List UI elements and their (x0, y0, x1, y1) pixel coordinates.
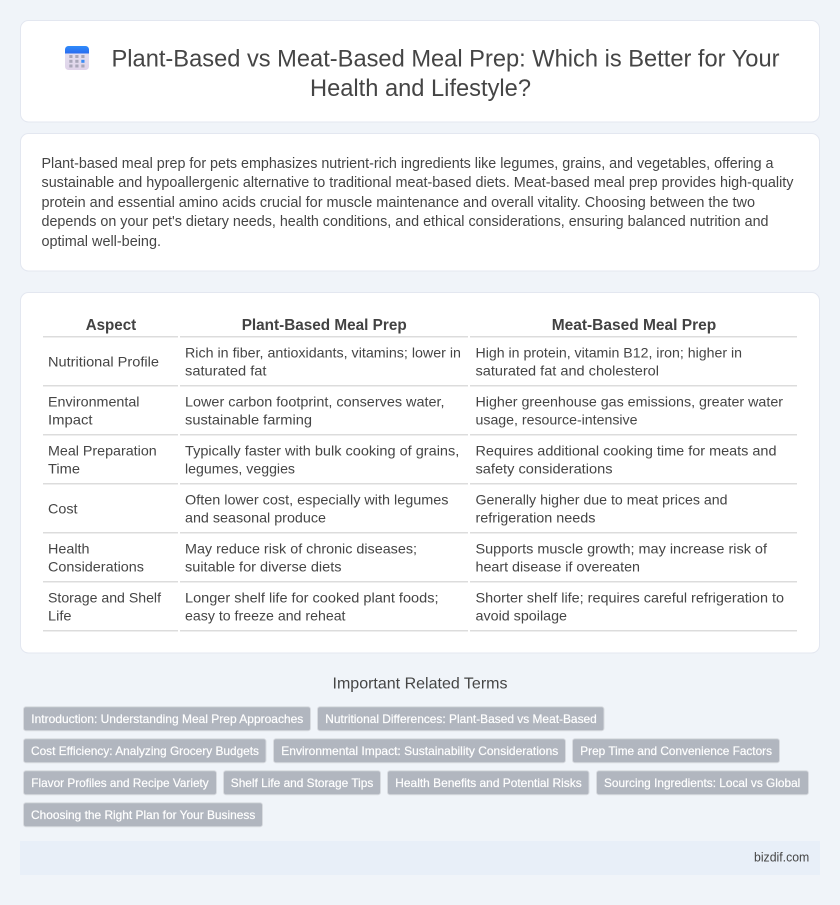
table row: meal preparation time (43, 442, 797, 484)
table row: health considerations: Considerations (48, 558, 144, 574)
table row: nutritional profile (43, 344, 797, 386)
table row: health considerations: suitable for diverse diets (185, 558, 342, 574)
tag: Nutritional Differences: Plant-Based vs Meat-Based (325, 712, 597, 726)
table row: cost: refrigeration needs (476, 510, 596, 526)
table row: nutritional profile: Rich in fiber, antioxidants, vitamins; lower in (185, 344, 461, 360)
table row: cost (43, 492, 797, 534)
text block: introduction paragraph (42, 156, 794, 250)
table row: nutritional profile: Nutritional Profile (48, 354, 159, 370)
table row: storage and shelf life: easy to freeze and reheat (185, 608, 346, 624)
table row: health considerations: Health (48, 540, 90, 556)
tag: Sourcing Ingredients: Local vs Global (604, 776, 800, 790)
table row: environmental impact: usage, resource-intensive (476, 412, 638, 428)
tag (224, 771, 380, 795)
table row: meal preparation time: Requires additional cooking time for meats and (476, 442, 776, 458)
tag: Environmental Impact: Sustainability Considerations (281, 744, 558, 758)
tag (388, 771, 589, 795)
panel: related term tags (24, 707, 808, 827)
tag: Shelf Life and Storage Tips (231, 776, 373, 790)
tag: Cost Efficiency: Analyzing Grocery Budgets (31, 744, 259, 758)
table row: environmental impact: sustainable farming (185, 412, 312, 428)
table row: cost: Generally higher due to meat prices and (476, 492, 728, 508)
table row: meal preparation time: legumes, veggies (185, 460, 295, 476)
table row: cost: and seasonal produce (185, 510, 326, 526)
footer (20, 841, 820, 875)
table row: environmental impact: Impact (48, 412, 93, 428)
table row: meal preparation time: Meal Preparation (48, 442, 157, 458)
table row: storage and shelf life: Longer shelf life for cooked plant foods; (185, 590, 438, 606)
table row: cost: Often lower cost, especially with legumes (185, 492, 448, 508)
table row: storage and shelf life: Storage and Shelf (48, 590, 161, 606)
table row: storage and shelf life: avoid spoilage (476, 608, 567, 624)
table row: health considerations: May reduce risk of chronic diseases; (185, 540, 417, 556)
table row: storage and shelf life: Shorter shelf life; requires careful refrigeration to (476, 590, 784, 606)
table row: meal preparation time: safety considerations (476, 460, 612, 476)
panel: introduction (20, 134, 820, 271)
heading: important related terms: Important Related Terms (332, 675, 508, 692)
table row: nutritional profile: saturated fat and cholesterol (476, 362, 659, 378)
tag: Flavor Profiles and Recipe Variety (31, 776, 209, 790)
table row: storage and shelf life: Life (48, 608, 72, 624)
table header row (43, 317, 797, 338)
title: Plant-Based vs Meat-Based Meal Prep: Which is Better for Your (112, 46, 780, 73)
tag (318, 707, 604, 731)
tag (274, 739, 566, 763)
table row: health considerations: Supports muscle growth; may increase risk of (476, 540, 767, 556)
table row: nutritional profile: saturated fat (185, 362, 267, 378)
tag (24, 803, 262, 827)
tag (24, 707, 310, 731)
table row: meal preparation time: Time (48, 460, 80, 476)
title: Health and Lifestyle? (310, 75, 531, 102)
text block: introduction paragraph: depends on your pet's dietary needs, health conditions, and ethical considerations, ensuring balanced nutrition and (42, 214, 768, 230)
table row: health considerations: heart disease if overeaten (476, 558, 640, 574)
text block: introduction paragraph: sustainable and hypoallergenic alternative to traditional meat-based diets. Meat-based meal prep provides high-quality (42, 175, 794, 191)
text block: introduction paragraph: Plant-based meal prep for pets emphasizes nutrient-rich ingredients like legumes, grains, and vegetables, offering a (42, 156, 774, 172)
panel: comparison table (20, 292, 820, 653)
panel: header (20, 20, 820, 122)
tag: Health Benefits and Potential Risks (395, 776, 582, 790)
text block: introduction paragraph: optimal well-being. (42, 234, 161, 250)
table row: environmental impact: Environmental (48, 394, 140, 410)
tag: Introduction: Understanding Meal Prep Approaches (31, 712, 303, 726)
tag (24, 739, 266, 763)
tag: Prep Time and Convenience Factors (580, 744, 772, 758)
table row: storage and shelf life (43, 590, 797, 632)
table row: health considerations (43, 540, 797, 582)
table header row: Plant-Based Meal Prep (242, 317, 407, 334)
tag (596, 771, 808, 795)
table row: nutritional profile: High in protein, vitamin B12, iron; higher in (476, 344, 742, 360)
footer: bizdif.com (754, 850, 809, 865)
title (112, 46, 780, 102)
table row: environmental impact: Lower carbon footprint, conserves water, (185, 394, 444, 410)
table header row: Meat-Based Meal Prep (552, 317, 716, 334)
tag: Choosing the Right Plan for Your Business (31, 808, 255, 822)
tag (572, 739, 780, 763)
table header row: Aspect (86, 317, 137, 334)
table row: environmental impact (43, 394, 797, 436)
table row: meal preparation time: Typically faster with bulk cooking of grains, (185, 442, 459, 458)
tag (24, 771, 216, 795)
table row: environmental impact: Higher greenhouse gas emissions, greater water (476, 394, 783, 410)
table row: cost: Cost (48, 500, 78, 516)
text block: introduction paragraph: protein and essential amino acids crucial for muscle maintenance and overall vitality. Choosing between the two (42, 195, 755, 211)
icon: calendar (65, 46, 89, 70)
